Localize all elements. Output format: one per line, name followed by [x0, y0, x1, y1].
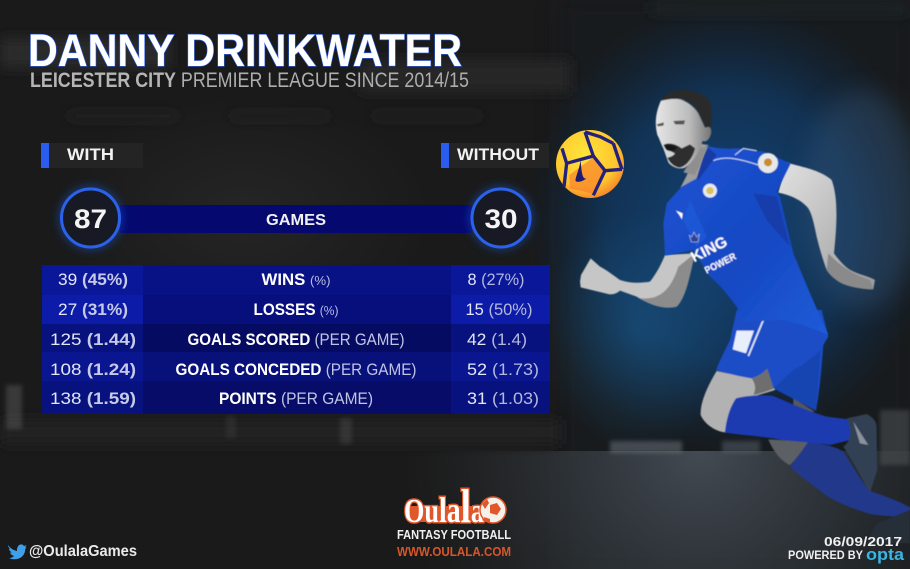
icon: twitter bird [8, 544, 26, 559]
jersey sponsor [688, 234, 738, 277]
without label: WITHOUT [457, 145, 540, 164]
without games circle: 30 [484, 204, 518, 234]
title: DANNY DRINKWATER [28, 25, 462, 76]
without label [441, 143, 549, 168]
games row [60, 187, 532, 249]
player head [656, 90, 712, 175]
with label: WITH [67, 145, 114, 164]
row: losses [58, 301, 532, 319]
row: goals scored: 42 (1.4) [467, 331, 527, 349]
row: losses: 15 (50%) [466, 301, 532, 319]
row: points: 138 (1.59) [50, 390, 136, 408]
row: losses: LOSSES (%) [254, 301, 338, 319]
row: wins: WINS (%) [262, 271, 330, 289]
row: goals scored: GOALS SCORED (PER GAME) [188, 331, 404, 349]
jersey sponsor: POWER [703, 251, 738, 277]
row: goals conceded [50, 361, 539, 379]
opta logo: opta [866, 545, 905, 564]
row: points [50, 390, 539, 408]
row: wins: 8 (27%) [468, 271, 524, 289]
row: goals scored [50, 331, 527, 349]
row: wins [58, 271, 524, 289]
player lower body [701, 310, 910, 543]
date: 06/09/2017 [824, 534, 902, 549]
row: goals conceded: 52 (1.73) [467, 361, 539, 379]
games row: GAMES [266, 212, 326, 229]
row: goals scored: 125 (1.44) [50, 331, 136, 349]
fantasy football: FANTASY FOOTBALL [397, 528, 511, 542]
row: points: POINTS (PER GAME) [219, 390, 373, 408]
with games circle: 87 [74, 204, 107, 234]
twitter handle: @OulalaGames [29, 543, 137, 560]
row: points: 31 (1.03) [467, 390, 539, 408]
with label [41, 143, 143, 168]
player arms [580, 163, 875, 308]
icon: puma logo [676, 211, 683, 219]
row: losses: 27 (31%) [58, 301, 128, 319]
icon: soccer ball [480, 497, 506, 523]
row: goals conceded: GOALS CONCEDED (PER GAME) [176, 361, 416, 379]
row: goals conceded: 108 (1.24) [50, 361, 136, 379]
without games circle [470, 187, 532, 249]
subtitle: LEICESTER CITY PREMIER LEAGUE SINCE 2014/15 [30, 69, 469, 92]
jersey sponsor: KING [688, 234, 730, 266]
with games circle [60, 187, 122, 249]
icon: crown [689, 232, 699, 242]
football [556, 130, 624, 198]
row: wins: 39 (45%) [58, 271, 128, 289]
powered by: POWERED BY [788, 548, 863, 562]
stats table [42, 265, 550, 414]
oulala logo: Oulala [404, 480, 484, 533]
player jersey [663, 143, 828, 335]
website: WWW.OULALA.COM [397, 545, 511, 559]
